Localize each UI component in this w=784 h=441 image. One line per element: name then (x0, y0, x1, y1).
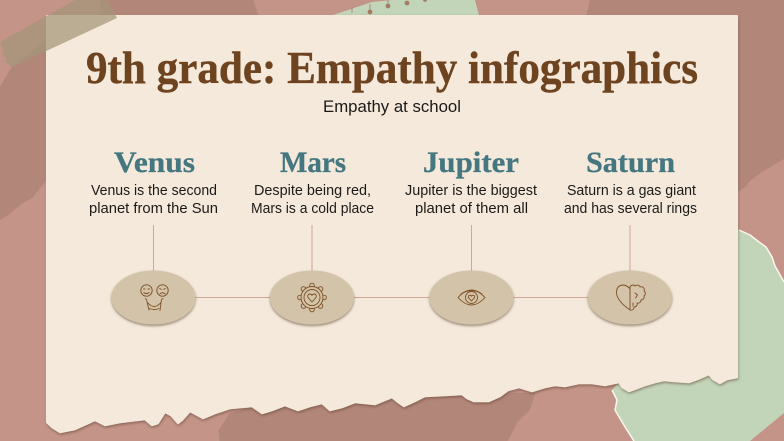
title: 9th grade: Empathy infographics (86, 42, 698, 93)
badge: Saturn (588, 270, 672, 324)
description: Saturn (564, 182, 697, 217)
badge: Jupiter (430, 270, 514, 324)
badge: Mars (270, 270, 354, 324)
description: Mars: Despite being red, (254, 182, 371, 199)
heading: Mars: Mars (280, 146, 346, 179)
column: Jupiter (405, 146, 538, 324)
notebook spiral on green scrap (352, 0, 426, 14)
icon: gear with heart (298, 283, 326, 312)
icon: eye with heart (458, 290, 485, 305)
description: Mars (251, 182, 374, 217)
column: Venus (89, 146, 218, 324)
badge: Venus (112, 270, 196, 324)
description: Mars: Mars is a cold place (251, 200, 374, 217)
description: Saturn: Saturn is a gas giant (567, 182, 697, 199)
column: Saturn (564, 146, 697, 324)
heading: Saturn: Saturn (586, 146, 675, 179)
icon: happy and sad faces (141, 285, 168, 310)
washi tape (0, 0, 117, 67)
description: Jupiter: planet of them all (415, 200, 528, 217)
heading: Jupiter: Jupiter (423, 146, 519, 179)
icon: half heart half brain (616, 285, 645, 310)
description: Venus: Venus is the second (91, 182, 217, 199)
heading: Venus: Venus (114, 146, 195, 179)
connector lines (154, 225, 630, 298)
column: Mars (251, 146, 374, 324)
description: Saturn: and has several rings (564, 200, 697, 217)
description: Jupiter: Jupiter is the biggest (405, 182, 538, 199)
subtitle: Empathy at school (323, 97, 461, 116)
description: Venus: planet from the Sun (89, 200, 218, 217)
description: Jupiter (405, 182, 538, 217)
green scrap, lower right (612, 230, 784, 441)
description: Venus (89, 182, 218, 217)
